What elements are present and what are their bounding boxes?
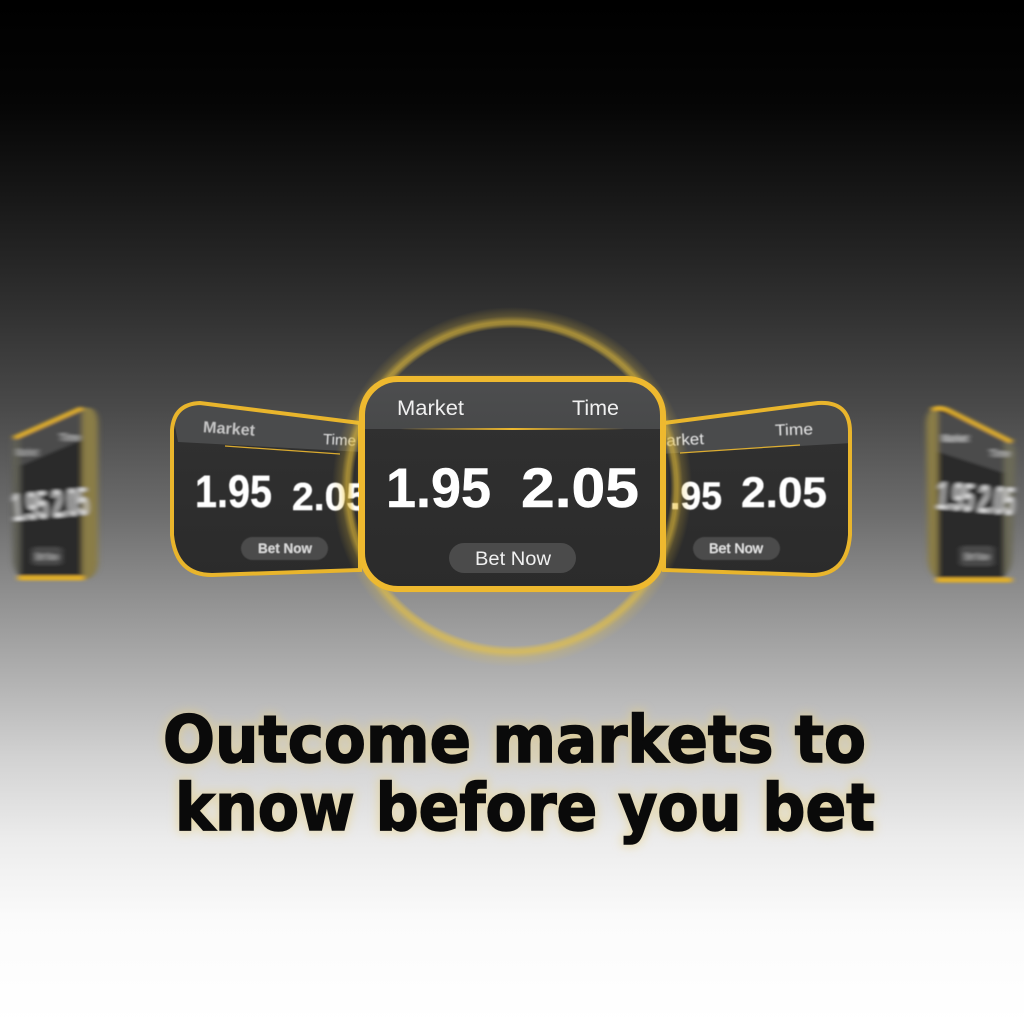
left card labels [195, 419, 368, 519]
far left blurred card: Time [60, 432, 80, 444]
title: know before you bet [175, 771, 875, 846]
title [163, 703, 875, 846]
right side card [652, 400, 852, 575]
glowing circle halo [332, 307, 692, 667]
left side card [170, 400, 368, 575]
right card button: Bet Now [709, 540, 764, 556]
far right blurred card: Market [942, 433, 968, 445]
right card labels: Market [652, 431, 705, 451]
left card header [175, 405, 358, 455]
far right blurred card: Bet Now [965, 552, 989, 563]
title: Outcome markets to [163, 703, 866, 778]
right card labels: .95 [670, 475, 722, 518]
far left blurred card: 1.95 2.05 [10, 480, 90, 530]
center card [360, 377, 665, 591]
left card labels: Time [323, 431, 356, 450]
right card labels [652, 421, 827, 518]
left card button: Bet Now [258, 540, 312, 556]
right card labels: 2.05 [741, 469, 827, 517]
center card button: Bet Now [475, 549, 551, 570]
far left blurred card: Bet Now [36, 552, 58, 563]
left card labels: 1.95 [195, 466, 272, 517]
right card header [666, 405, 848, 454]
center card odds: 1.95 [386, 456, 491, 519]
left card labels: Market [203, 419, 256, 440]
far left blurred card [10, 404, 100, 582]
center card odds [386, 456, 639, 519]
right card button [693, 537, 780, 560]
center card labels: Market [397, 397, 464, 420]
right card labels: Time [775, 421, 813, 440]
center card: Time [572, 397, 619, 420]
center card header [365, 382, 660, 430]
center card button [449, 543, 576, 573]
left card button [241, 537, 328, 560]
far right blurred card: Time [990, 448, 1010, 460]
far right blurred card [920, 404, 1020, 582]
left card labels: 2.05 [292, 476, 368, 519]
far left blurred card: Market [16, 447, 38, 459]
title: know before you bet [175, 771, 875, 846]
title: Outcome markets to [163, 703, 866, 778]
center card odds: 2.05 [521, 456, 639, 519]
